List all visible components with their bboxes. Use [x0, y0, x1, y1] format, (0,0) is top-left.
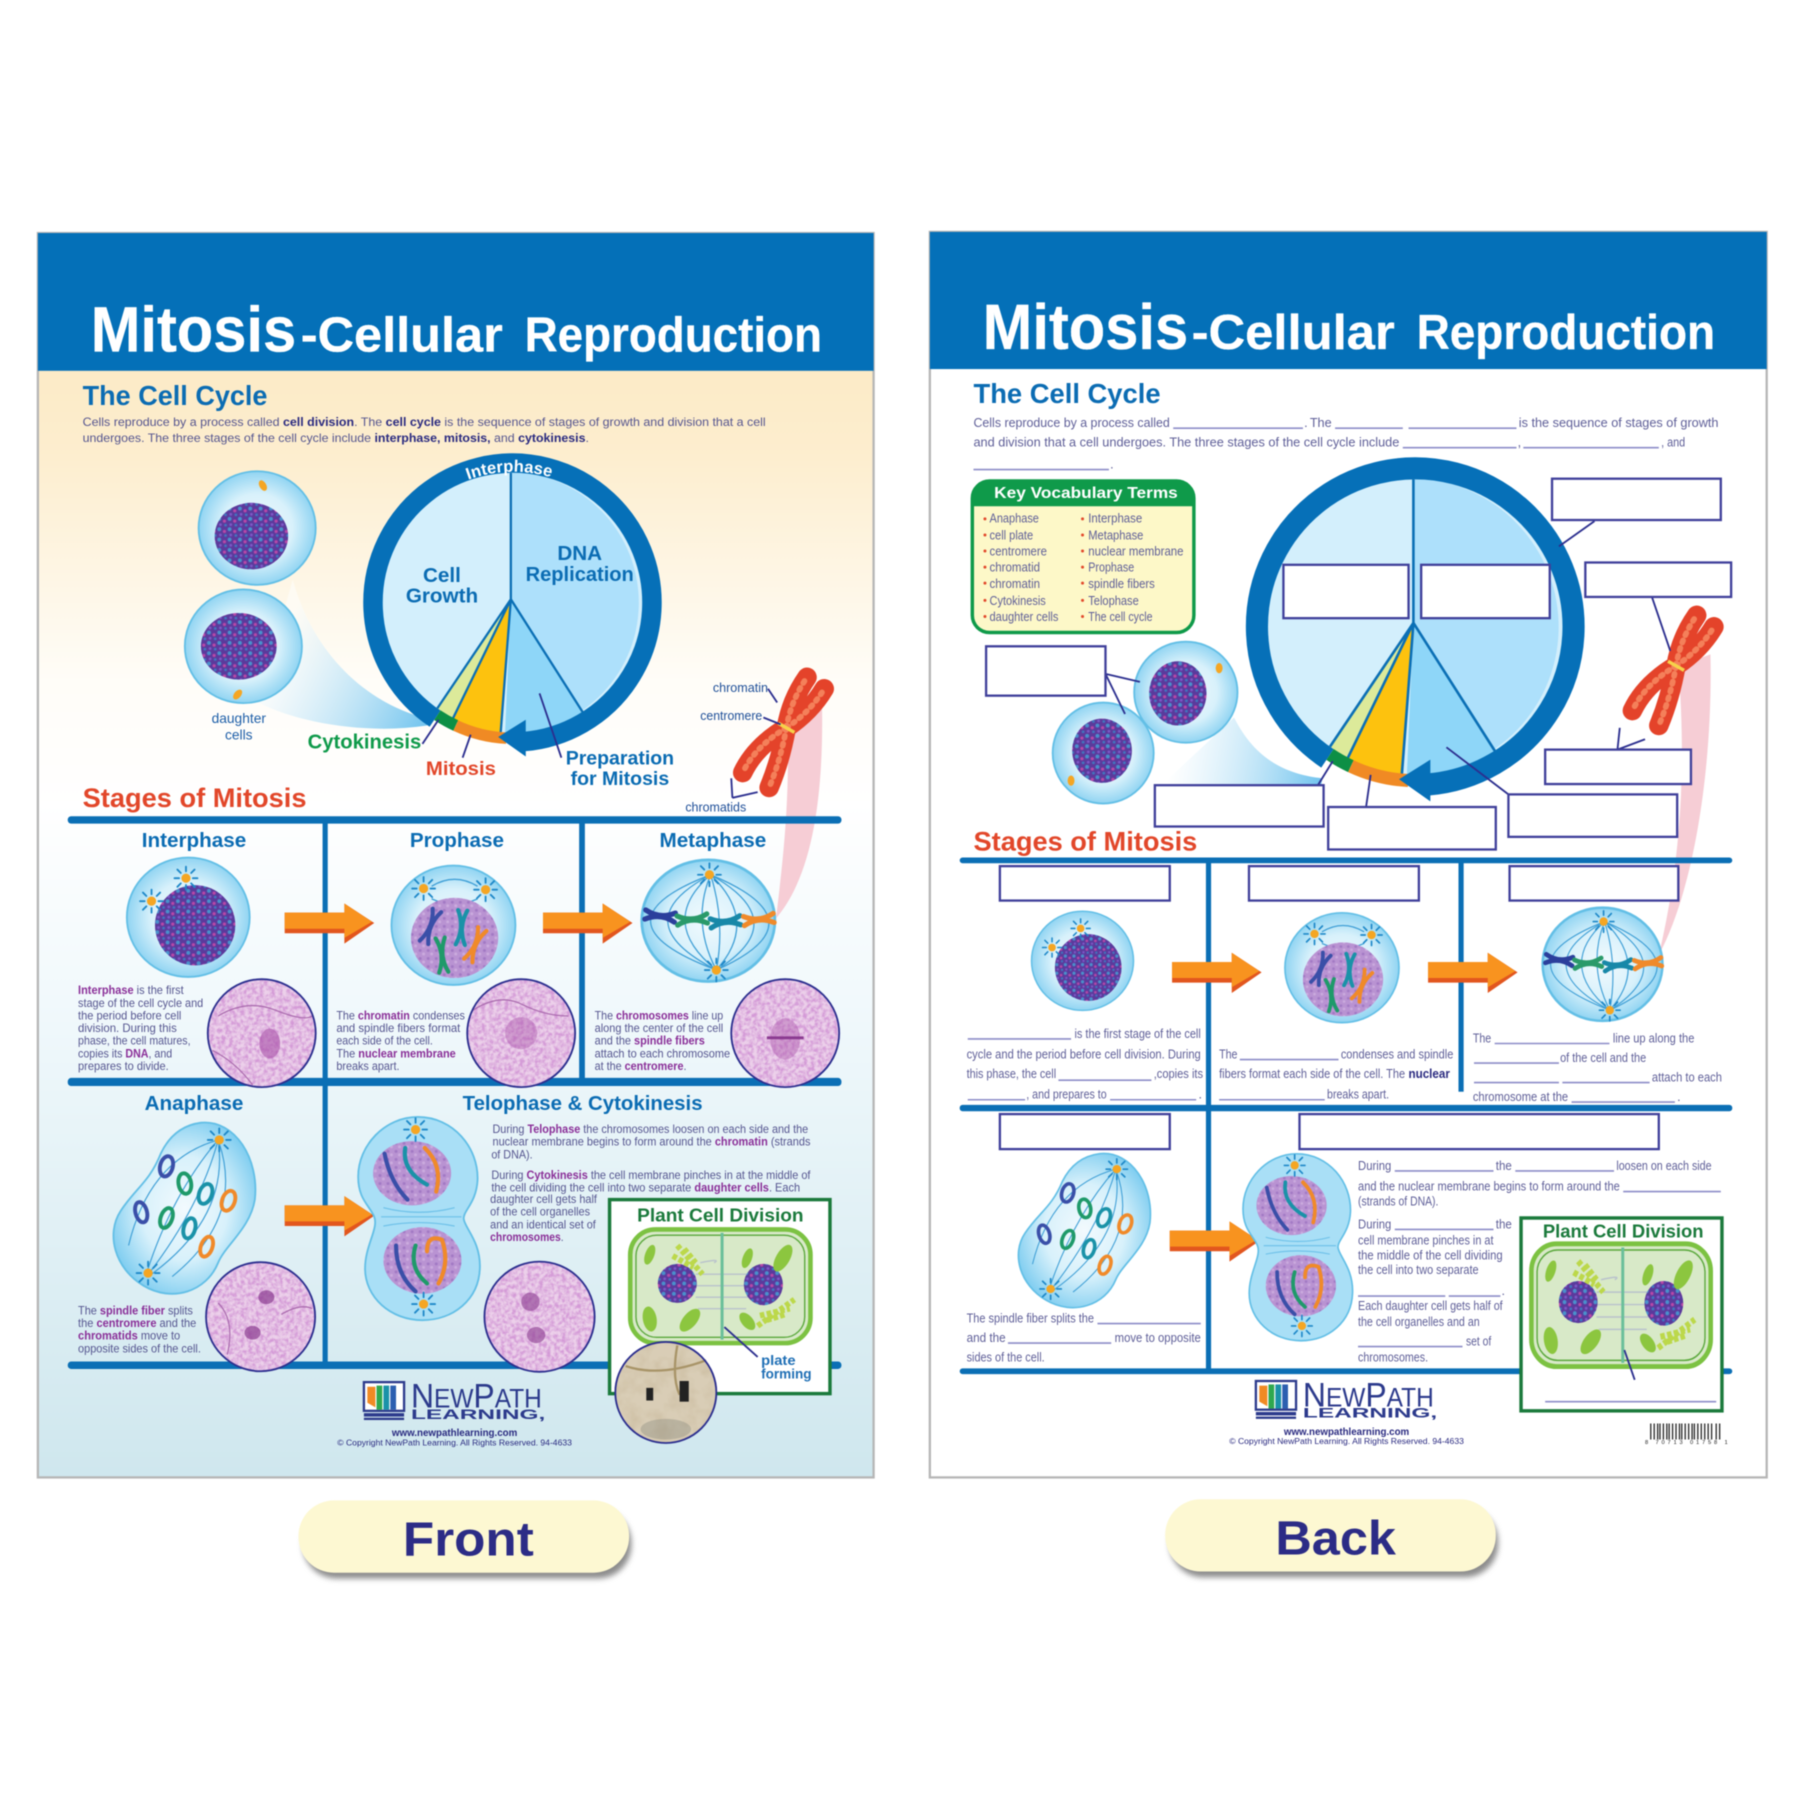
text: interphase description: phase, the cell matures, [78, 1034, 191, 1048]
text: telophase fill-in: loosen on each side [1616, 1159, 1712, 1173]
text: interphase description: Interphase is the first [78, 983, 184, 997]
vocabulary list: centromere [990, 545, 1047, 559]
text: metaphase fill-in: . [1677, 1090, 1681, 1104]
panel: key vocabulary terms [972, 481, 1194, 633]
intro worksheet text [973, 416, 1718, 471]
text: interphase description [78, 983, 203, 1073]
label: daughter cells: daughter [212, 711, 266, 726]
text: interphase fill-in: is the first stage of the cell [1074, 1027, 1201, 1041]
label: daughter cells: cells [225, 727, 253, 742]
text: telophase fill-in: the cell into two separate [1358, 1263, 1479, 1277]
stage: Prophase: Prophase [410, 829, 504, 852]
text: metaphase fill-in: line up along the [1613, 1031, 1694, 1045]
micrograph: plant cell [615, 1342, 716, 1443]
title [91, 293, 822, 365]
label: Cell Growth: Growth [406, 585, 478, 608]
text: interphase description: division. During this [78, 1021, 177, 1035]
text: prophase description: each side of the cell. [336, 1034, 433, 1048]
chart: cell cycle pie [362, 452, 662, 757]
label: Mitosis [426, 735, 496, 780]
heading: plant cell division: Plant Cell Division [1543, 1220, 1704, 1241]
stage: Metaphase [595, 829, 839, 1087]
label: plate forming: forming [761, 1367, 812, 1382]
stage: Metaphase worksheet [1473, 866, 1722, 1104]
text: anaphase fill-in: and the [967, 1331, 1006, 1345]
heading: Stages of Mitosis: Stages of Mitosis [83, 783, 307, 813]
stage grid lines [68, 816, 841, 1369]
text: interphase description: copies its DNA, and [78, 1046, 172, 1060]
text: telophase fill-in: chromosomes. [1358, 1350, 1428, 1364]
intro worksheet text: Cells reproduce by a process called [973, 416, 1170, 430]
button: Back: Back [1275, 1511, 1396, 1565]
text: telophase fill-in: During [1358, 1217, 1391, 1231]
micrograph: metaphase [731, 979, 839, 1087]
label: DNA Replication: Replication [526, 564, 634, 586]
icon: telophase cell [358, 1117, 480, 1320]
intro text: Cells reproduce by a process called cell division. The cell cycle is the sequence of stages of growth and division that a cell [83, 415, 766, 429]
vocabulary list: cell plate [990, 529, 1033, 543]
vocabulary list: Telophase [1088, 594, 1139, 608]
panel: front poster [36, 231, 876, 1479]
text: prophase fill-in [1219, 1047, 1453, 1102]
text: prophase fill-in: The [1219, 1047, 1237, 1061]
stage: Telophase and Cytokinesis [358, 1092, 811, 1372]
poster background [38, 233, 874, 1477]
logo: NewPath Learning: LEARNING, [1303, 1406, 1437, 1421]
chromosome diagram [1632, 615, 1714, 726]
title [983, 291, 1715, 363]
text: telophase fill-in: the [1496, 1159, 1512, 1173]
icon: metaphase cell [1543, 908, 1662, 1021]
button: Front: Front [403, 1512, 534, 1566]
text: interphase description: the period before cell [78, 1008, 181, 1022]
text: telophase fill-in: and the nuclear membrane begins to form around the [1358, 1179, 1620, 1193]
pink zoom beam from chromosome to metaphase cell [1659, 654, 1711, 955]
heading: The Cell Cycle: The Cell Cycle [83, 380, 267, 411]
label: Cell Growth: Cell [423, 564, 461, 587]
beam from ring to daughter cells [258, 580, 427, 729]
text: metaphase description [595, 1008, 730, 1073]
logo: NewPath Learning: LEARNING, [411, 1407, 545, 1422]
text: metaphase description: The chromosomes line up [595, 1008, 723, 1022]
label: DNA Replication [526, 542, 634, 586]
micrograph: anaphase [206, 1262, 315, 1371]
text: cytokinesis description: During Cytokinesis the cell membrane pinches in at the middle of [491, 1168, 811, 1182]
vocabulary list: Interphase [1088, 511, 1142, 525]
icon: anaphase cell [1018, 1153, 1150, 1308]
stage: Interphase: Interphase [142, 829, 246, 852]
stage: Anaphase: Anaphase [145, 1092, 243, 1115]
text: telophase fill-in: cell membrane pinches in at [1358, 1233, 1494, 1247]
footer: website and copyright [1229, 1427, 1464, 1446]
vocabulary list: Cytokinesis [990, 594, 1046, 608]
vocabulary list: chromatid [990, 561, 1040, 575]
label: Preparation for Mitosis [540, 693, 674, 790]
logo: NewPath Learning [364, 1377, 545, 1422]
icon: interphase cell [1032, 911, 1134, 1010]
intro worksheet text: , and [1661, 436, 1685, 450]
text: cytokinesis description: chromosomes. [490, 1230, 564, 1244]
vocabulary list: nuclear membrane [1088, 545, 1184, 559]
text: cytokinesis description: and an identical set of [490, 1217, 596, 1231]
text: prophase description: The nuclear membrane [336, 1046, 456, 1060]
label: chromatin: chromatin [713, 681, 768, 695]
poster background [930, 232, 1767, 1477]
text: metaphase description: and the spindle fibers [595, 1034, 705, 1048]
footer: website and copyright: www.newpathlearning.com [391, 1428, 518, 1439]
label: Preparation for Mitosis: Preparation [566, 748, 674, 770]
text: prophase description: and spindle fibers format [336, 1021, 461, 1035]
stage: Anaphase [78, 1092, 315, 1371]
blank label boxes with leaders [986, 479, 1731, 849]
micrograph: interphase [208, 979, 316, 1087]
title: Mitosis [91, 293, 296, 365]
text: telophase fill-in: . [1502, 1284, 1505, 1298]
label: daughter cells [212, 711, 266, 742]
daughter cell: lower [185, 589, 302, 703]
panel: back poster [930, 232, 1767, 1477]
beam from ring to daughter cells [1148, 717, 1322, 801]
logo: NewPath Learning: NEWPATH [411, 1377, 542, 1415]
intro worksheet text: , [1518, 436, 1521, 450]
vocabulary list: Prophase [1088, 561, 1134, 575]
title: Reproduction [1417, 305, 1715, 360]
text: interphase fill-in: . [1198, 1088, 1202, 1102]
label: Cell Growth [406, 564, 478, 608]
text: telophase fill-in: Each daughter cell gets half of [1358, 1299, 1503, 1313]
micrograph: telophase [484, 1262, 595, 1372]
text: anaphase description: The spindle fiber splits [78, 1303, 193, 1317]
intro text [83, 415, 766, 445]
vocabulary list [983, 511, 1184, 624]
button: Back [1165, 1499, 1498, 1577]
title: -Cellular [301, 307, 503, 362]
label: Preparation for Mitosis: for Mitosis [571, 768, 669, 790]
header band [38, 233, 874, 371]
text: telophase fill-in [1358, 1159, 1721, 1364]
text: anaphase fill-in [967, 1311, 1201, 1364]
pink zoom beam from chromosome to metaphase cell [776, 700, 822, 918]
arrow: anaphase to telophase [1170, 1221, 1259, 1262]
stage: Prophase [336, 829, 575, 1087]
text: metaphase fill-in [1473, 1031, 1722, 1104]
arrow: prophase to metaphase [1428, 953, 1518, 993]
vocabulary list: Anaphase [990, 511, 1039, 525]
arrow: prophase to metaphase [543, 903, 633, 944]
vocabulary list: chromatin [990, 577, 1040, 591]
text: metaphase description: along the center of the cell [595, 1021, 723, 1035]
logo: NewPath Learning [1256, 1376, 1437, 1421]
text: prophase description: The chromatin condenses [336, 1008, 465, 1022]
text: interphase fill-in [967, 1027, 1203, 1102]
text: telophase fill-in: set of [1466, 1334, 1492, 1348]
text: metaphase fill-in: attach to each [1652, 1070, 1722, 1084]
footer: website and copyright: www.newpathlearning.com [1283, 1427, 1410, 1438]
text: telophase fill-in: (strands of DNA). [1358, 1194, 1438, 1208]
icon: prophase cell [391, 866, 515, 985]
icon: anaphase cell [113, 1122, 255, 1294]
label: Cytokinesis: Cytokinesis [308, 730, 421, 753]
text: telophase fill-in: the middle of the cell dividing [1358, 1248, 1503, 1262]
icon: metaphase cell [642, 860, 775, 982]
text: telophase description: of DNA). [491, 1147, 533, 1161]
arrow: interphase to prophase [285, 903, 374, 944]
text: cytokinesis description: the cell dividing the cell into two separate daughter cells. Each [491, 1181, 800, 1195]
stage: Anaphase worksheet [967, 1114, 1201, 1364]
footer: website and copyright: © Copyright NewPath Learning. All Rights Reserved. 94-4633 [337, 1437, 572, 1447]
text: anaphase description: the centromere and the [78, 1316, 197, 1330]
daughter cell: upper [199, 471, 316, 585]
heading: The Cell Cycle: The Cell Cycle [973, 378, 1161, 409]
icon: prophase cell [1285, 913, 1399, 1023]
text: anaphase fill-in: The spindle fiber splits the [967, 1311, 1094, 1325]
stage: Interphase worksheet [967, 866, 1203, 1102]
text: interphase fill-in: this phase, the cell [967, 1067, 1056, 1081]
intro worksheet text: and division that a cell undergoes. The three stages of the cell cycle include [973, 436, 1399, 450]
daughter cell: lower [1053, 703, 1154, 804]
text: cytokinesis description: daughter cell gets half [490, 1192, 598, 1206]
label: Cytokinesis [308, 720, 439, 753]
chart: cell cycle pie [1257, 468, 1574, 801]
footer: website and copyright [337, 1428, 572, 1447]
text: anaphase fill-in: move to opposite [1115, 1331, 1201, 1345]
label: Interphase on ring: Interphase [464, 458, 552, 480]
button: Front [298, 1500, 631, 1578]
heading: plant cell division: Plant Cell Division [637, 1204, 804, 1225]
micrograph: prophase [467, 979, 575, 1087]
text: metaphase description: at the centromere. [595, 1059, 686, 1073]
text: metaphase description: attach to each chromosome [595, 1046, 730, 1060]
text: telophase description: nuclear membrane begins to form around the chromatin (strands [492, 1135, 810, 1149]
text: cytokinesis description [490, 1168, 811, 1244]
text: metaphase fill-in: The [1473, 1031, 1491, 1045]
text: telophase description: During Telophase the chromosomes loosen on each side and the [492, 1122, 808, 1136]
text: interphase fill-in: ,copies its [1154, 1067, 1203, 1081]
icon: dividing plant cell [1531, 1244, 1711, 1367]
text: telophase fill-in: the [1496, 1217, 1512, 1231]
text: metaphase fill-in: chromosome at the [1473, 1090, 1568, 1104]
stage: Telophase and Cytokinesis worksheet [1243, 1114, 1721, 1364]
label: centromere: centromere [700, 709, 762, 723]
label: plate forming [761, 1353, 812, 1382]
text: prophase fill-in: fibers format each side of the cell. The [1219, 1067, 1405, 1081]
arrow: anaphase to telophase [285, 1196, 374, 1236]
text: metaphase fill-in: of the cell and the [1560, 1051, 1646, 1065]
text: telophase fill-in: During [1358, 1159, 1391, 1173]
text: prophase description [336, 1008, 465, 1073]
heading: Stages of Mitosis: Stages of Mitosis [973, 827, 1197, 857]
vocabulary list: daughter cells [990, 610, 1058, 624]
intro worksheet text: . [1304, 416, 1308, 430]
text: anaphase description: chromatids move to [78, 1329, 181, 1343]
stage: Metaphase: Metaphase [659, 829, 766, 852]
barcode [1645, 1423, 1728, 1446]
text: prophase fill-in: condenses and spindle [1341, 1047, 1453, 1061]
label: plate forming: plate [761, 1353, 796, 1368]
vocabulary list: Metaphase [1088, 529, 1143, 543]
icon: telophase cell [1243, 1154, 1353, 1341]
stage: Interphase [78, 829, 316, 1087]
barcode: 8 70713 01758 1 [1645, 1440, 1728, 1446]
text: interphase fill-in: cycle and the period before cell division. During [967, 1047, 1201, 1061]
intro worksheet text: is the sequence of stages of growth [1519, 416, 1718, 430]
vocabulary list: The cell cycle [1088, 610, 1153, 624]
panel: plant cell division [1521, 1218, 1722, 1411]
label: Mitosis: Mitosis [426, 758, 496, 780]
intro text: undergoes. The three stages of the cell cycle include interphase, mitosis, and cytokinesis. [83, 431, 589, 445]
intro worksheet text: The [1310, 416, 1332, 430]
text: interphase description: prepares to divide. [78, 1059, 169, 1073]
daughter cell: upper [1134, 642, 1238, 743]
arrow: interphase to prophase [1172, 953, 1262, 993]
icon: interphase cell [127, 858, 250, 977]
stage: Prophase worksheet [1219, 866, 1453, 1102]
footer: website and copyright: © Copyright NewPath Learning. All Rights Reserved. 94-4633 [1229, 1436, 1464, 1446]
text: anaphase fill-in: sides of the cell. [967, 1350, 1045, 1364]
vocabulary list: spindle fibers [1088, 577, 1155, 591]
title: -Cellular [1192, 305, 1395, 360]
intro worksheet text: . [1110, 457, 1114, 471]
text: interphase description: stage of the cell cycle and [78, 996, 203, 1010]
header band [930, 232, 1767, 369]
text: prophase description: breaks apart. [336, 1059, 399, 1073]
logo: NewPath Learning: NEWPATH [1303, 1376, 1434, 1414]
stage grid lines [960, 858, 1732, 1374]
stage: Telophase and Cytokinesis: Telophase & Cytokinesis [463, 1092, 703, 1115]
icon: dividing plant cell [630, 1229, 810, 1343]
panel: plant cell division [610, 1200, 830, 1443]
text: anaphase description [78, 1303, 201, 1355]
text: telophase description [491, 1122, 810, 1161]
title: Mitosis [983, 291, 1188, 363]
label: chromatids: chromatids [685, 801, 746, 815]
text: cytokinesis description: of the cell organelles [490, 1205, 590, 1219]
text: interphase fill-in: , and prepares to [1026, 1088, 1107, 1102]
text: telophase fill-in: the cell organelles and an [1358, 1315, 1480, 1329]
text: prophase fill-in: nuclear [1409, 1067, 1450, 1081]
text: prophase fill-in: breaks apart. [1327, 1088, 1389, 1102]
text: anaphase description: opposite sides of the cell. [78, 1341, 201, 1355]
heading: key vocabulary terms: Key Vocabulary Terms [994, 485, 1178, 502]
chromosome diagram [685, 677, 824, 815]
label: DNA Replication: DNA [557, 542, 602, 565]
title: Reproduction [525, 307, 822, 362]
